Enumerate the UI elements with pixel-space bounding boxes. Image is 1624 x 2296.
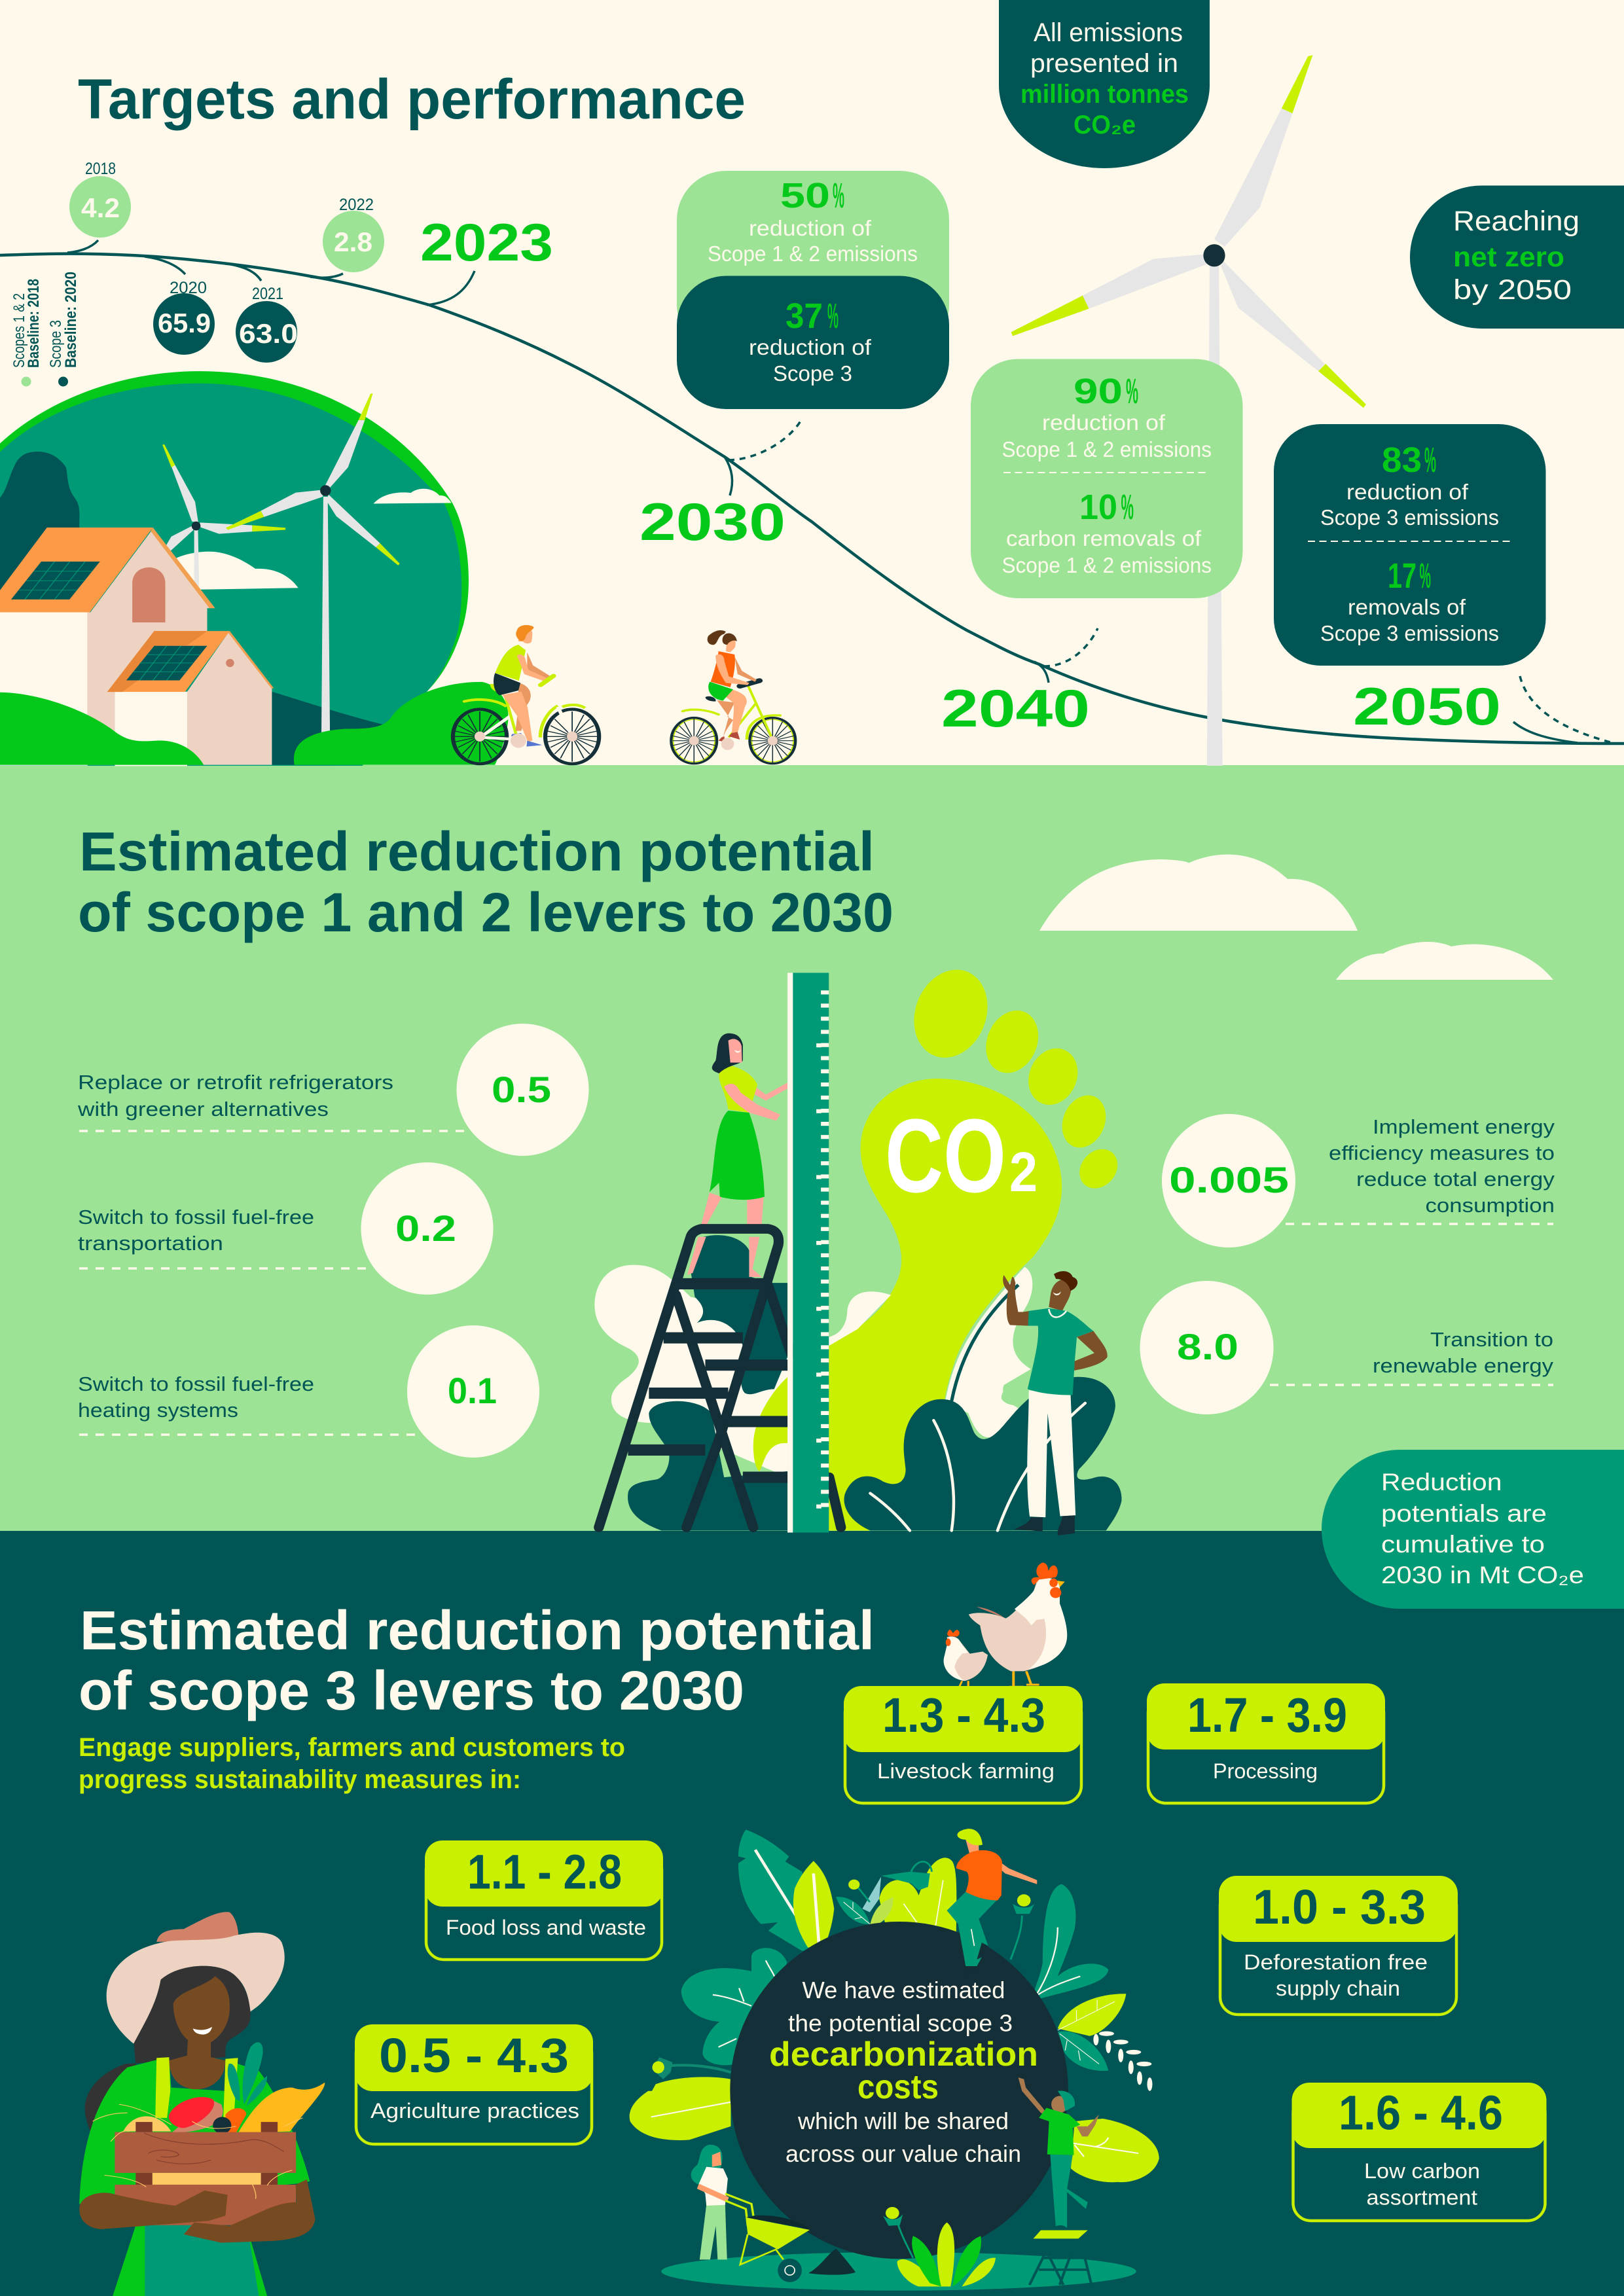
data point: 2021 scope 3: 2021 [252,285,283,303]
callout: net zero [1410,186,1624,329]
lever: renewable energy 8.0: Transition to [1430,1328,1553,1351]
callout: reduction potentials note [1322,1450,1624,1609]
icon: ladder [599,1229,841,1528]
data point: 2022 scopes 1 and 2 [310,196,384,278]
subtitle: progress sustainability measures in: [79,1765,521,1794]
dark circle [730,1922,1068,2259]
callout: reduction potentials note: potentials are [1381,1500,1547,1527]
lever: energy efficiency 0.005 [1162,1114,1555,1247]
data point: 2020 scope 3: 2020 [170,279,207,297]
lever card: food loss and waste [425,1840,663,1960]
panel: 2050 targets: Scope 3 emissions [1320,505,1499,529]
legend [10,272,80,386]
callout: reduction potentials note: cumulative to [1381,1531,1545,1558]
year label: 2050: 2050 [1353,677,1501,736]
callout: million tonnes [999,0,1210,168]
heading: scope 3 [79,1600,875,1721]
circle text: decarbonization costs: the potential scope 3 [788,2009,1013,2037]
year label: 2040 [941,628,1098,738]
lever card: livestock farming: 1.3 - 4.3 [882,1688,1045,1742]
heading: scope 1 and 2: Estimated reduction potential [79,821,875,882]
data point: 2021 scope 3 [228,264,298,363]
illustration: farmer with crate [79,1912,325,2296]
circle text: decarbonization costs: decarbonization [769,2036,1038,2073]
subtitle: Engage suppliers, farmers and customers to [79,1733,625,1762]
panel: 2050 targets: reduction of [1346,480,1469,504]
panel: 2030 targets: Scope 3 [773,361,852,386]
panel: 2050 targets: Scope 3 emissions [1320,621,1499,645]
icon: woman on bicycle [671,630,795,764]
lever card: low carbon assortment: 1.6 - 4.6 [1339,2085,1503,2140]
data point: 2020 scope 3: 65.9 [158,308,211,338]
panel: 2040 targets: Scope 1 & 2 emissions [1001,437,1212,461]
lever: energy efficiency 0.005: efficiency measures to [1329,1141,1555,1164]
lever: transportation 0.2: transportation [78,1232,223,1255]
title: Targets and performance [78,68,746,131]
lever card: agriculture practices: Agriculture practices [370,2099,579,2123]
icon: CO2 footprint [829,960,1125,1531]
year label: 2023: 2023 [420,213,553,272]
panel: 2030 targets: Scope 1 & 2 emissions [708,242,918,266]
year label: 2030: 2030 [640,493,785,552]
circle text: decarbonization costs: across our value chain [785,2140,1021,2167]
icon: bottom plant [883,2207,996,2287]
lever: energy efficiency 0.005: reduce total energy [1356,1168,1555,1191]
panel: 2040 targets: carbon removals of [1006,526,1202,550]
circle text: decarbonization costs: costs [857,2068,939,2106]
callout: million tonnes: All emissions [1034,18,1183,47]
lever card: livestock farming [844,1686,1083,1803]
icon: large cloud [1039,855,1358,931]
data point: 2020 scope 3 [145,257,215,355]
icon: person reaching [1019,2077,1099,2285]
lever card: deforestation free supply chain [1219,1876,1458,2015]
panel: 2050 targets: % [1419,556,1431,596]
lever: energy efficiency 0.005: Implement energy [1373,1115,1555,1138]
data point: 2018 scopes 1 and 2 [67,160,131,253]
circle text: decarbonization costs: We have estimated [803,1977,1005,2003]
icon: leafy plant [844,1377,1121,1531]
year label: 2030 [640,418,803,552]
lever: transportation 0.2: 0.2 [395,1208,456,1249]
callout: net zero: by 2050 [1453,274,1572,306]
lever card: processing: 1.7 - 3.9 [1187,1688,1347,1742]
panel: 2040 targets: % [1121,488,1134,527]
panel: 2050 targets: 17 [1388,556,1416,596]
panel: 2050 targets: removals of [1348,595,1466,619]
lever card: processing: Processing [1213,1759,1318,1783]
icon: right bush [294,682,509,765]
panel: 2030 targets: 37 [785,296,823,336]
callout: reduction potentials note: 2030 in Mt CO₂e [1381,1562,1584,1588]
heading: scope 3: Estimated reduction potential [80,1600,875,1661]
heading: scope 1 and 2 [78,821,893,943]
panel: 2030 targets: % [827,296,839,336]
illustration: chickens [944,1562,1067,1690]
callout: million tonnes: CO₂e [1074,111,1136,139]
panel: 2050 targets [1274,424,1546,666]
panel: 2030 targets: reduction of [749,216,872,240]
illustration: carbon footprint with ruler and people [594,960,1125,1535]
lever card: livestock farming: Livestock farming [877,1759,1055,1783]
lever card: agriculture practices: 0.5 - 4.3 [379,2028,569,2083]
icon: man pointing [1003,1271,1108,1535]
icon: large house [0,528,215,766]
data point: 2018 scopes 1 and 2: 2018 [85,160,116,178]
CO2 label: CO [885,1097,1006,1214]
heading: scope 1 and 2: of scope 1 and 2 levers to 2030 [78,882,893,943]
illustration: houses and wind turbines [0,393,509,766]
lever card: processing [1147,1683,1385,1803]
lever: energy efficiency 0.005: 0.005 [1169,1159,1289,1200]
icon: person watering [947,1829,1037,1975]
lever: heating 0.1: Switch to fossil fuel-free [78,1372,314,1395]
data point: 2022 scopes 1 and 2: 2022 [339,196,374,214]
lever card: deforestation free supply chain: Deforestation free [1244,1950,1428,1974]
lever card: deforestation free supply chain: supply chain [1276,1977,1400,2000]
lever: refrigerators 0.5: Replace or retrofit refrigerators [78,1071,393,1094]
emissions curve [0,254,1624,744]
year label: 2023 [420,213,553,305]
lever card: food loss and waste: 1.1 - 2.8 [467,1844,622,1899]
lever: renewable energy 8.0: 8.0 [1177,1326,1238,1367]
legend: Baseline: 2020 [62,272,80,368]
lever: transportation 0.2: Switch to fossil fuel-free [78,1206,314,1229]
lever: refrigerators 0.5 [77,1024,589,1156]
illustration: cyclists [453,625,795,764]
lever card: low carbon assortment: assortment [1367,2186,1477,2210]
icon: man on bicycle [453,625,599,764]
panel: 2050 targets: % [1424,440,1436,480]
callout: reduction potentials note: Reduction [1381,1469,1502,1496]
heading: scope 3: of scope 3 levers to 2030 [79,1660,744,1721]
subtitle [79,1733,625,1794]
lever: refrigerators 0.5: with greener alternatives [77,1098,329,1121]
icon: ruler [787,973,829,1533]
panel background: scope 3 [0,1531,1624,2296]
callout: net zero: net zero [1453,242,1564,273]
illustration: decarbonization garden [630,1829,1159,2291]
panel: 2030 targets [677,171,949,409]
panel: 2040 targets: 10 [1079,488,1117,527]
lever card: agriculture practices [355,2024,593,2144]
data point: 2021 scope 3: 63.0 [239,318,298,349]
panel: 2030 targets: 50 [780,176,830,215]
legend: Baseline: 2018 [25,279,43,368]
panel: 2040 targets: Scope 1 & 2 emissions [1001,553,1212,577]
panel: 2030 targets: % [833,176,844,215]
big wind turbine [1011,55,1366,766]
lever: refrigerators 0.5: 0.5 [492,1069,551,1110]
icon: small house [107,631,274,766]
panel: 2030 targets: reduction of [749,335,872,359]
CO2 subscript: 2 [1009,1141,1038,1204]
lever card: low carbon assortment: Low carbon [1364,2159,1480,2183]
legend: Scope 3 [47,320,65,368]
lever: renewable energy 8.0 [1140,1281,1554,1414]
panel: 2040 targets: % [1126,372,1138,411]
panel background: targets [0,0,1624,765]
lever: heating 0.1: 0.1 [448,1370,497,1411]
year label: 2050 [1353,676,1610,743]
icon: left bush [0,692,204,765]
callout: million tonnes: million tonnes [1020,80,1189,109]
panel: 2040 targets: reduction of [1042,410,1166,435]
lever card: low carbon assortment [1292,2083,1546,2221]
lever: energy efficiency 0.005: consumption [1426,1194,1555,1217]
panel: 2040 targets: 90 [1074,372,1123,411]
circle text: decarbonization costs: which will be shared [797,2108,1009,2134]
lever: heating 0.1 [78,1325,539,1458]
panel background: scope 1 and 2 [0,765,1624,1531]
panel: 2040 targets [971,359,1242,598]
lever card: food loss and waste: Food loss and waste [446,1916,646,1939]
lever: transportation 0.2 [78,1162,494,1295]
data point: 2022 scopes 1 and 2: 2.8 [334,226,372,257]
callout: million tonnes: presented in [1030,49,1178,78]
illustration: hill dome [0,371,469,766]
lever: heating 0.1: heating systems [78,1399,238,1422]
icon: small cloud [1336,942,1553,980]
data point: 2018 scopes 1 and 2: 4.2 [81,192,120,223]
lever card: deforestation free supply chain: 1.0 - 3.3 [1253,1880,1426,1934]
icon: white sprig [1093,2031,1152,2091]
icon: small wind turbine [162,444,285,590]
legend: Scopes 1 & 2 [10,293,28,368]
circle text: decarbonization costs [769,1977,1038,2167]
icon: woman with wheelbarrow [691,2145,856,2282]
panel: 2050 targets: 83 [1382,440,1422,480]
callout: net zero: Reaching [1453,206,1579,237]
icon: woman measuring [687,1033,787,1277]
lever: renewable energy 8.0: renewable energy [1373,1354,1554,1377]
icon: large wind turbine [226,393,400,734]
year label: 2040: 2040 [941,679,1090,738]
